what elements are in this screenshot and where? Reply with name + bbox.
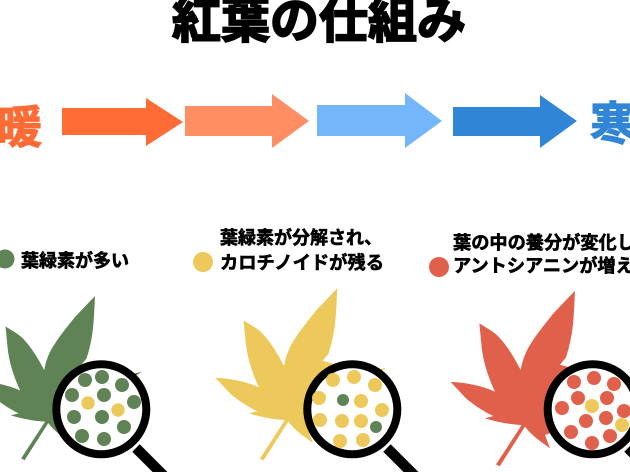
magnifier: red stage (548, 364, 630, 472)
magnifier: green stage (56, 364, 172, 472)
panel: green stage (0, 250, 172, 472)
legend dot: green (0, 250, 14, 268)
legend dot: yellow (193, 252, 213, 272)
arrow 2: light orange (185, 94, 309, 148)
green leaf (0, 296, 142, 460)
caption: yellow stage: 葉緑素が分解され、 (220, 227, 382, 248)
caption: red stage: 葉の中の養分が変化し (453, 232, 630, 253)
magnifier: yellow stage (307, 364, 423, 472)
panel: red stage (429, 232, 630, 472)
arrow 1: deep orange (62, 98, 183, 146)
panel: yellow stage (193, 227, 423, 472)
yellow leaf (215, 288, 387, 460)
legend dot: red (429, 257, 449, 277)
arrow 4: deep blue (453, 95, 577, 148)
caption: yellow stage: カロチノイドが残る (220, 252, 384, 273)
arrow 3: light blue (317, 93, 442, 148)
red leaf (451, 291, 625, 466)
caption: green stage: 葉緑素が多い (21, 250, 129, 271)
